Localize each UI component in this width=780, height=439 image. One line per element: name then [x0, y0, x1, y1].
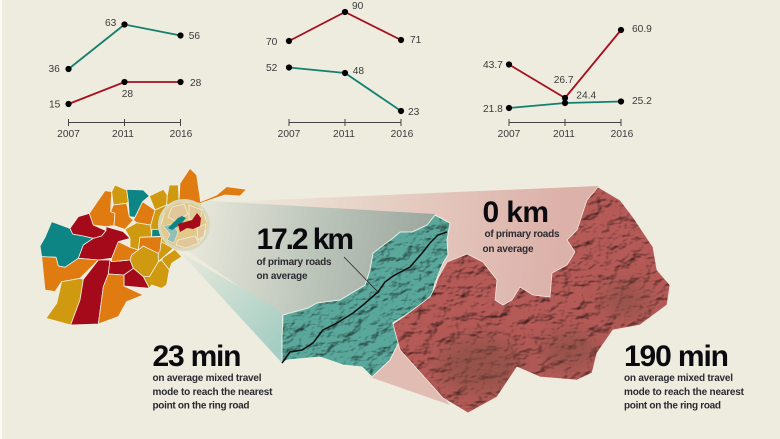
zoom beam: pink lower wedge: [370, 340, 450, 405]
chart 3 labels: [483, 24, 652, 140]
leader line to road: [344, 257, 378, 292]
chart 3 teal series: [509, 102, 621, 108]
23 min caption: on average mixed travel: [152, 373, 262, 384]
province group: yellow: [46, 185, 208, 325]
line chart 2: [266, 1, 422, 140]
red terrain shading patches: [438, 282, 647, 393]
chart 1 labels: [48, 18, 202, 140]
chart 2 labels: 70: [266, 37, 278, 48]
0 km caption: on average: [482, 244, 534, 255]
chart 1 labels: 2011: [112, 129, 134, 140]
chart 2 labels: 90: [352, 1, 364, 12]
zoom beam: teal: [180, 252, 283, 364]
callout: 23 min: [152, 340, 273, 412]
chart 3 labels: 26.7: [554, 75, 574, 86]
190 min caption: [624, 373, 745, 412]
chart 3 labels: 2011: [553, 129, 575, 140]
chart 3 labels: 25.2: [632, 96, 652, 107]
0 km caption: of primary roads: [484, 229, 560, 240]
23 min caption: point on the ring road: [152, 400, 250, 412]
chart 3 labels: 60.9: [632, 24, 652, 35]
0 km caption: [482, 229, 560, 255]
line chart 1: [48, 18, 202, 140]
chart 3 labels: 43.7: [483, 60, 503, 71]
chart 1 points: [65, 21, 184, 107]
chart 1 labels: 2007: [57, 129, 80, 140]
lens: teal district: [168, 216, 186, 230]
chart 2 labels: 48: [353, 66, 364, 77]
chart 3 points: [506, 27, 624, 111]
17.2 km caption: of primary roads: [256, 257, 332, 268]
road line: [282, 232, 447, 363]
chart 3 labels: 2007: [498, 129, 521, 140]
chart 3 labels: 21.8: [483, 104, 503, 115]
190 min caption: point on the ring road: [624, 400, 721, 412]
callout: 190 min: [624, 340, 745, 412]
chart 2 labels: [266, 1, 422, 140]
zoom beam: gray: [186, 200, 435, 316]
chart 2 points: [286, 9, 404, 114]
line chart 3: [483, 24, 652, 140]
chart 2 red series: [289, 12, 401, 41]
province group: orange: [42, 168, 247, 324]
red terrain relief: [388, 182, 676, 418]
chart 2 labels: 23: [408, 107, 420, 118]
23 min figure: 23 min: [152, 340, 242, 373]
province map of Afghanistan: [40, 168, 247, 325]
chart 2 labels: 2016: [391, 129, 414, 140]
23 min caption: mode to reach the nearest: [152, 387, 273, 398]
province group: teal: [40, 189, 161, 267]
red terrain: no road-access district: [388, 182, 676, 418]
190 min caption: on average mixed travel: [624, 373, 733, 384]
lens: muted teal provinces: [163, 224, 178, 243]
chart 2 axis: [289, 119, 401, 126]
17.2 km caption: on average: [256, 271, 308, 282]
0 km figure: 0 km: [482, 196, 549, 229]
chart 3 labels: 2016: [611, 129, 634, 140]
190 min caption: mode to reach the nearest: [624, 387, 745, 398]
chart 1 labels: 56: [189, 31, 200, 42]
chart 1 labels: 2016: [170, 129, 193, 140]
zoom beam: pink: [200, 186, 598, 330]
teal terrain: low road-access district: [282, 214, 450, 378]
red terrain outline: [393, 187, 670, 413]
17.2 km caption: [256, 257, 332, 282]
23 min caption: [152, 373, 273, 412]
chart 1 labels: 28: [190, 78, 202, 89]
chart 2 labels: 2007: [278, 129, 301, 140]
chart 3 labels: 24.4: [576, 90, 596, 102]
callout: 0 km: [482, 196, 560, 255]
province group: dark red: [70, 213, 149, 325]
chart 1 labels: 36: [48, 64, 60, 75]
lens: red district: [178, 213, 201, 232]
page edge strip: [0, 0, 2, 439]
magnifier lens: [160, 200, 208, 250]
teal terrain relief: [282, 216, 450, 376]
chart 2 labels: 2011: [333, 129, 355, 140]
chart 3 axis: [509, 119, 621, 126]
callout: 17.2 km: [256, 223, 354, 282]
chart 1 axis: [68, 119, 180, 126]
chart 1 red series: [68, 82, 180, 104]
17.2 km figure: 17.2 km: [256, 223, 354, 256]
chart 1 labels: 15: [49, 100, 61, 110]
chart 1 labels: 28: [122, 89, 133, 100]
teal terrain outline: [282, 215, 450, 377]
chart 2 teal series: [289, 68, 401, 111]
chart 2 labels: 71: [410, 35, 422, 46]
chart 3 red series: [509, 30, 621, 98]
chart 1 labels: 63: [105, 18, 117, 29]
lens: muted neighbouring provinces: [168, 204, 206, 248]
chart 2 labels: 52: [266, 63, 278, 74]
chart 1 teal series: [68, 24, 180, 69]
190 min figure: 190 min: [624, 340, 729, 373]
magnifier circle over selected provinces: [160, 200, 208, 250]
